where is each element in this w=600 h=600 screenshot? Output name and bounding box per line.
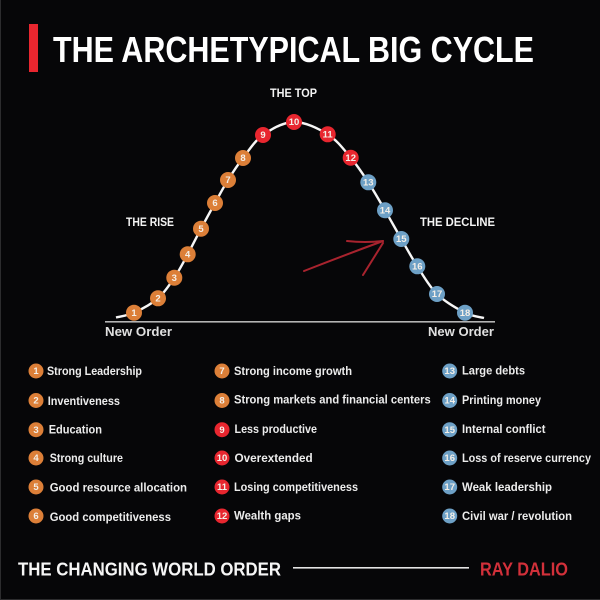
- legend item 2: Inventiveness: [48, 394, 120, 408]
- marker 1: 1: [131, 308, 137, 319]
- legend item 8: Strong markets and financial centers: [234, 392, 431, 406]
- marker 12: 12: [345, 153, 356, 164]
- marker 18: 18: [460, 308, 470, 319]
- legend column: the decline: [442, 364, 591, 524]
- marker 11: 11: [323, 130, 333, 140]
- legend item 8: 8: [219, 396, 225, 407]
- marker 5: [193, 221, 209, 237]
- marker 18: [457, 305, 473, 321]
- legend item 15: Internal conflict: [462, 422, 546, 436]
- legend item 14: Printing money: [462, 393, 541, 407]
- legend item 11: Losing competitiveness: [234, 480, 358, 494]
- legend item 2: [28, 393, 120, 408]
- legend item 14: [442, 393, 541, 408]
- legend item 3: 3: [33, 425, 39, 436]
- legend item 15: 15: [444, 425, 456, 436]
- legend item 3: [28, 422, 102, 437]
- legend item 2: 2: [33, 396, 39, 407]
- marker 2: 2: [155, 294, 161, 304]
- marker 14: 14: [380, 206, 391, 216]
- marker 8: [235, 150, 251, 166]
- legend item 18: 18: [444, 511, 455, 522]
- title accent bar: [29, 24, 38, 72]
- legend item 4: [28, 450, 123, 466]
- marker 16: 16: [412, 262, 423, 272]
- legend item 10: 10: [217, 453, 227, 464]
- legend item 6: Good competitiveness: [50, 510, 171, 524]
- footer: author: RAY DALIO: [480, 560, 568, 580]
- marker 16: [409, 258, 425, 274]
- marker 9: 9: [260, 130, 266, 141]
- marker 6: [207, 195, 223, 211]
- marker 10: 10: [289, 117, 299, 128]
- marker 3: 3: [172, 273, 177, 284]
- legend item 16: 16: [444, 453, 455, 464]
- legend item 5: 5: [33, 482, 39, 493]
- legend item 17: 17: [444, 482, 455, 493]
- legend item 12: 12: [217, 511, 227, 522]
- marker 1: [126, 305, 142, 321]
- curve markers: [126, 114, 473, 321]
- marker 11: [320, 126, 336, 142]
- marker 15: 15: [396, 234, 407, 245]
- legend item 13: [442, 364, 525, 378]
- marker 12: [343, 150, 359, 166]
- footer: book title: THE CHANGING WORLD ORDER: [18, 560, 281, 580]
- legend item 4: Strong culture: [50, 451, 123, 465]
- legend item 9: Less productive: [234, 422, 317, 436]
- label: new order right: New Order: [428, 325, 494, 339]
- legend item 1: 1: [33, 366, 39, 377]
- marker 10: [286, 114, 302, 130]
- legend item 10: Overextended: [234, 451, 313, 465]
- marker 7: [220, 172, 236, 188]
- legend column: the rise: [28, 364, 187, 524]
- legend item 3: Education: [49, 422, 102, 436]
- marker 7: 7: [225, 175, 231, 186]
- label: the rise: THE RISE: [126, 215, 174, 229]
- marker 14: [377, 202, 393, 218]
- legend item 17: Weak leadership: [462, 480, 552, 494]
- label: new order left: New Order: [105, 325, 172, 339]
- legend item 7: Strong income growth: [234, 364, 352, 378]
- marker 4: 4: [185, 250, 191, 260]
- legend item 12: Wealth gaps: [234, 508, 301, 522]
- legend item 12: [214, 508, 301, 524]
- label: the top: THE TOP: [270, 86, 317, 100]
- legend column: the top: [214, 364, 431, 524]
- hand-drawn red arrow: [304, 241, 383, 275]
- marker 13: 13: [363, 178, 374, 188]
- marker 13: [360, 174, 376, 190]
- marker 5: 5: [198, 224, 204, 235]
- legend item 18: Civil war / revolution: [462, 509, 572, 523]
- legend item 9: [214, 422, 317, 437]
- legend item 14: 14: [444, 396, 456, 407]
- legend item 6: 6: [33, 511, 39, 522]
- baseline axis: [105, 321, 495, 323]
- legend item 13: Large debts: [462, 364, 525, 378]
- legend item 1: Strong Leadership: [47, 364, 142, 378]
- legend item 9: 9: [219, 425, 225, 436]
- marker 9: [255, 127, 271, 143]
- marker 15: [393, 231, 409, 247]
- marker 4: [180, 246, 196, 262]
- legend item 13: 13: [444, 366, 455, 377]
- label: the decline: THE DECLINE: [420, 215, 495, 229]
- legend item 4: 4: [33, 453, 39, 464]
- marker 17: [429, 286, 445, 302]
- marker 17: 17: [432, 289, 442, 300]
- bell curve: [116, 122, 484, 318]
- marker 8: 8: [240, 153, 246, 164]
- legend item 11: 11: [217, 482, 228, 493]
- legend item 5: Good resource allocation: [50, 480, 187, 494]
- marker 2: [150, 290, 166, 306]
- legend item 7: 7: [219, 366, 225, 377]
- marker 3: [166, 270, 182, 286]
- marker 6: 6: [212, 198, 218, 209]
